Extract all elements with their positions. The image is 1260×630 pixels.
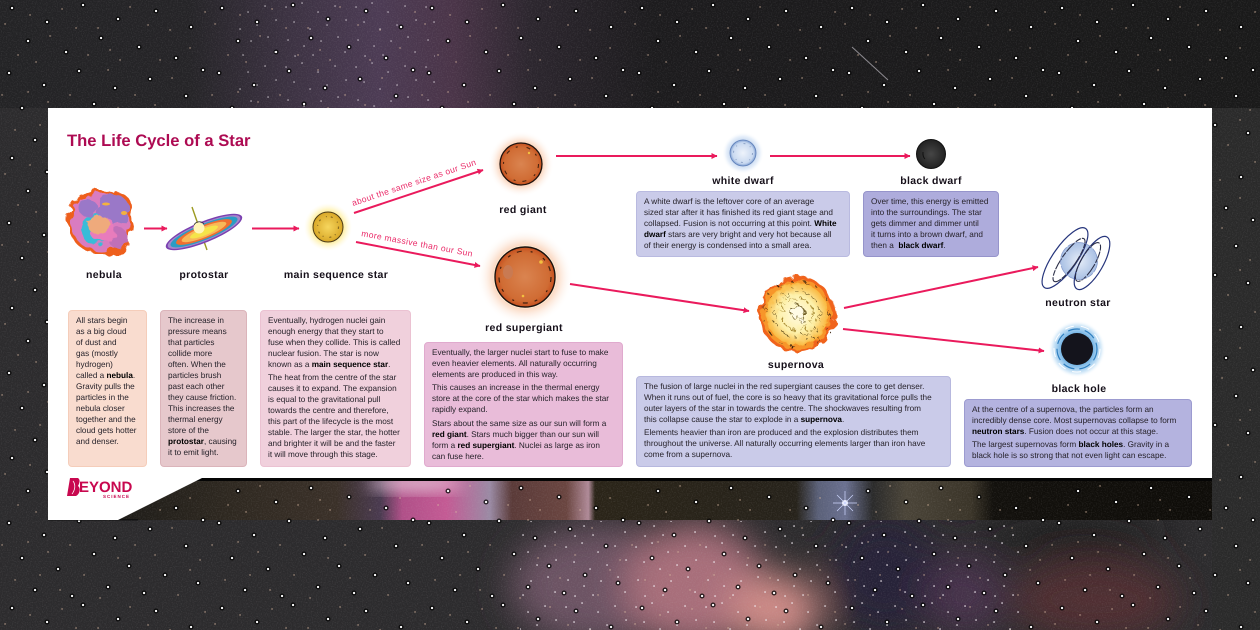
- logo: Beyond Science: EYOND: [79, 479, 132, 496]
- text block: supernova: outer layers of the star in towards the centre. The shockwaves resulting from: [644, 404, 921, 413]
- text block: nebula: together and the: [76, 415, 136, 424]
- label: main sequence star: main sequence star: [284, 269, 388, 281]
- text block: black dwarf: Over time, this energy is emitted: [871, 197, 988, 206]
- logo: Beyond Science: SCIENCE: [103, 494, 130, 499]
- text block: nebula: particles in the: [76, 393, 129, 402]
- text block: nebula: nebula closer: [76, 404, 125, 413]
- text block: protostar: thermal energy: [168, 415, 223, 424]
- icon: main sequence star: [304, 203, 352, 251]
- text block: neutron star and black hole: black hole is so strong that not even light can escape.: [972, 451, 1166, 460]
- text block: main sequence star: nuclear fusion. The star is now: [268, 349, 379, 358]
- text block: protostar: past each other: [168, 382, 224, 391]
- icon: red supergiant: [477, 229, 573, 325]
- text block: protostar: pressure means: [168, 327, 227, 336]
- text block: red giant and red supergiant: This causes an increase in the thermal energy: [432, 383, 599, 392]
- text block: protostar: often. When the: [168, 360, 226, 369]
- icon: protostar: [162, 207, 246, 257]
- text block: red giant and red supergiant: form a red supergiant. Nuclei as large as iron: [432, 441, 600, 450]
- icon: nebula: [66, 190, 132, 257]
- text block: protostar: particles brush: [168, 371, 221, 380]
- arrow: supernova to black hole: [843, 329, 1044, 351]
- label: white dwarf: white dwarf: [711, 175, 774, 187]
- text block: protostar: that particles: [168, 338, 214, 347]
- text block: nebula: of dust and: [76, 338, 117, 347]
- text block: black dwarf: gets dimmer and dimmer until: [871, 219, 979, 228]
- text block: nebula: and denser.: [76, 437, 119, 446]
- arrow note: same size as the Sun: about the same size as our Sun: [350, 157, 478, 208]
- text block: supernova: this collapse cause the star to explode in a supernova.: [644, 415, 844, 424]
- title: The Life Cycle of a Star: [67, 131, 251, 150]
- text block: nebula: hydrogen): [76, 360, 113, 369]
- label: black hole: black hole: [1052, 383, 1106, 395]
- text block: nebula: gas (mostly: [76, 349, 118, 358]
- text block: neutron star and black hole: At the centre of a supernova, the particles form an: [972, 405, 1154, 414]
- text block: supernova: Elements heavier than iron are produced and the explosion distributes them: [644, 428, 918, 437]
- panel: white card: [48, 108, 1212, 520]
- text block: supernova: come from a supernova.: [644, 450, 732, 459]
- text block: red giant and red supergiant: red giant. Stars much bigger than our sun will: [432, 430, 599, 439]
- arrow: white dwarf to black dwarf: [770, 155, 910, 157]
- text block: white dwarf: [636, 191, 850, 257]
- text block: white dwarf: sized star after it has finished its red giant stage and: [644, 208, 833, 217]
- text block: main sequence star: The heat from the centre of the star: [268, 373, 396, 382]
- text block: white dwarf: A white dwarf is the leftover core of an average: [644, 197, 814, 206]
- text block: neutron star and black hole: incredibly dense core. Most supernovas collapse to form: [972, 416, 1176, 425]
- text block: protostar: they cause friction.: [168, 393, 236, 402]
- text block: protostar: [160, 310, 247, 467]
- label: protostar: protostar: [179, 269, 229, 281]
- icon: white dwarf: [722, 132, 764, 174]
- text block: nebula: called a nebula.: [76, 371, 135, 380]
- text block: main sequence star: towards the centre and therefore,: [268, 406, 389, 415]
- arrow: protostar to main sequence star: [252, 228, 299, 230]
- text block: black dwarf: [863, 191, 999, 257]
- text block: protostar: protostar, causing: [168, 437, 237, 446]
- text block: white dwarf: collapsed. Fusion is not occurring at this point. White: [644, 219, 837, 228]
- text block: main sequence star: causes it to expand. The expansion: [268, 384, 397, 393]
- label: red supergiant: red supergiant: [485, 322, 563, 334]
- text block: red giant and red supergiant: even heavier elements. All naturally occurring: [432, 359, 597, 368]
- text block: neutron star and black hole: neutron stars. Fusion does not occur at this stage.: [972, 427, 1158, 436]
- text block: red giant and red supergiant: rapidly expand.: [432, 405, 488, 414]
- label: neutron star: neutron star: [1045, 297, 1111, 309]
- arrow: main sequence to red giant: [354, 170, 483, 213]
- text block: nebula: All stars begin: [76, 316, 127, 325]
- icon: neutron star: [1035, 222, 1117, 294]
- text block: main sequence star: is equal to the gravitational pull: [268, 395, 380, 404]
- text block: main sequence star: and brighter it will be and the faster: [268, 439, 395, 448]
- icon: red giant: [488, 131, 554, 197]
- text block: white dwarf: dwarf stars are very bright and very hot because all: [644, 230, 832, 239]
- arrow: nebula to protostar: [144, 228, 167, 230]
- text block: supernova: throughout the universe. All naturally occurring elements larger than iron have: [644, 439, 925, 448]
- text block: black dwarf: into the surroundings. The star: [871, 208, 982, 217]
- text block: nebula: cloud gets hotter: [76, 426, 137, 435]
- text block: red giant and red supergiant: elements are produced in this way.: [432, 370, 558, 379]
- label: black dwarf: black dwarf: [900, 175, 962, 187]
- text block: red giant and red supergiant: [424, 342, 623, 467]
- text block: protostar: store of the: [168, 426, 209, 435]
- text block: neutron star and black hole: [964, 399, 1192, 467]
- text block: main sequence star: it will move through this stage.: [268, 450, 378, 459]
- text block: main sequence star: enough energy that they start to: [268, 327, 384, 336]
- text block: supernova: [636, 376, 951, 467]
- band beneath the panel: [118, 476, 1212, 520]
- text block: protostar: This increases the: [168, 404, 234, 413]
- text block: red giant and red supergiant: Eventually, the larger nuclei start to fuse to make: [432, 348, 608, 357]
- text block: neutron star and black hole: The largest supernovas form black holes. Gravity in a: [972, 440, 1169, 449]
- text block: nebula: Gravity pulls the: [76, 382, 135, 391]
- text block: nebula: [68, 310, 147, 467]
- text block: supernova: The fusion of large nuclei in the red supergiant causes the core to get denser.: [644, 382, 924, 391]
- text block: red giant and red supergiant: Stars about the same size as our sun will form a: [432, 419, 606, 428]
- text block: main sequence star: stable. The larger the star, the hotter: [268, 428, 400, 437]
- text block: main sequence star: [260, 310, 411, 467]
- text block: supernova: When it runs out of fuel, the core is so heavy that its gravitational force pulls the: [644, 393, 932, 402]
- text block: protostar: collide more: [168, 349, 212, 358]
- text block: main sequence star: Eventually, hydrogen nuclei gain: [268, 316, 385, 325]
- text block: nebula: as a big cloud: [76, 327, 127, 336]
- text block: main sequence star: known as a main sequence star.: [268, 360, 390, 369]
- arrow: red giant to white dwarf: [556, 155, 717, 157]
- text block: protostar: it to emit light.: [168, 448, 219, 457]
- text block: main sequence star: this part of the lifecycle is the most: [268, 417, 393, 426]
- arrow: red supergiant to supernova: [570, 284, 749, 311]
- logo: Beyond Science: [67, 478, 132, 499]
- text block: protostar: The increase in: [168, 316, 224, 325]
- arrow: main sequence to red supergiant: [356, 242, 480, 266]
- label: nebula: nebula: [86, 269, 122, 281]
- text block: main sequence star: fuse when they collide. This is called: [268, 338, 400, 347]
- label: supernova: supernova: [768, 359, 824, 371]
- icon: black dwarf: [916, 140, 946, 168]
- text block: white dwarf: of their energy is condensed into a small area.: [644, 241, 811, 250]
- arrow: supernova to neutron star: [844, 267, 1038, 308]
- text block: black dwarf: it turns into a brown dwarf, and: [871, 230, 983, 239]
- text block: red giant and red supergiant: store at the core of the star which makes the star: [432, 394, 609, 403]
- label: red giant: red giant: [499, 204, 547, 216]
- text block: black dwarf: then a black dwarf.: [871, 241, 946, 250]
- arrow note: more massive than the Sun: more massive than our Sun: [361, 228, 474, 259]
- text block: red giant and red supergiant: can fuse here.: [432, 452, 484, 461]
- icon: black hole: [1051, 323, 1103, 375]
- icon: supernova: [759, 276, 835, 352]
